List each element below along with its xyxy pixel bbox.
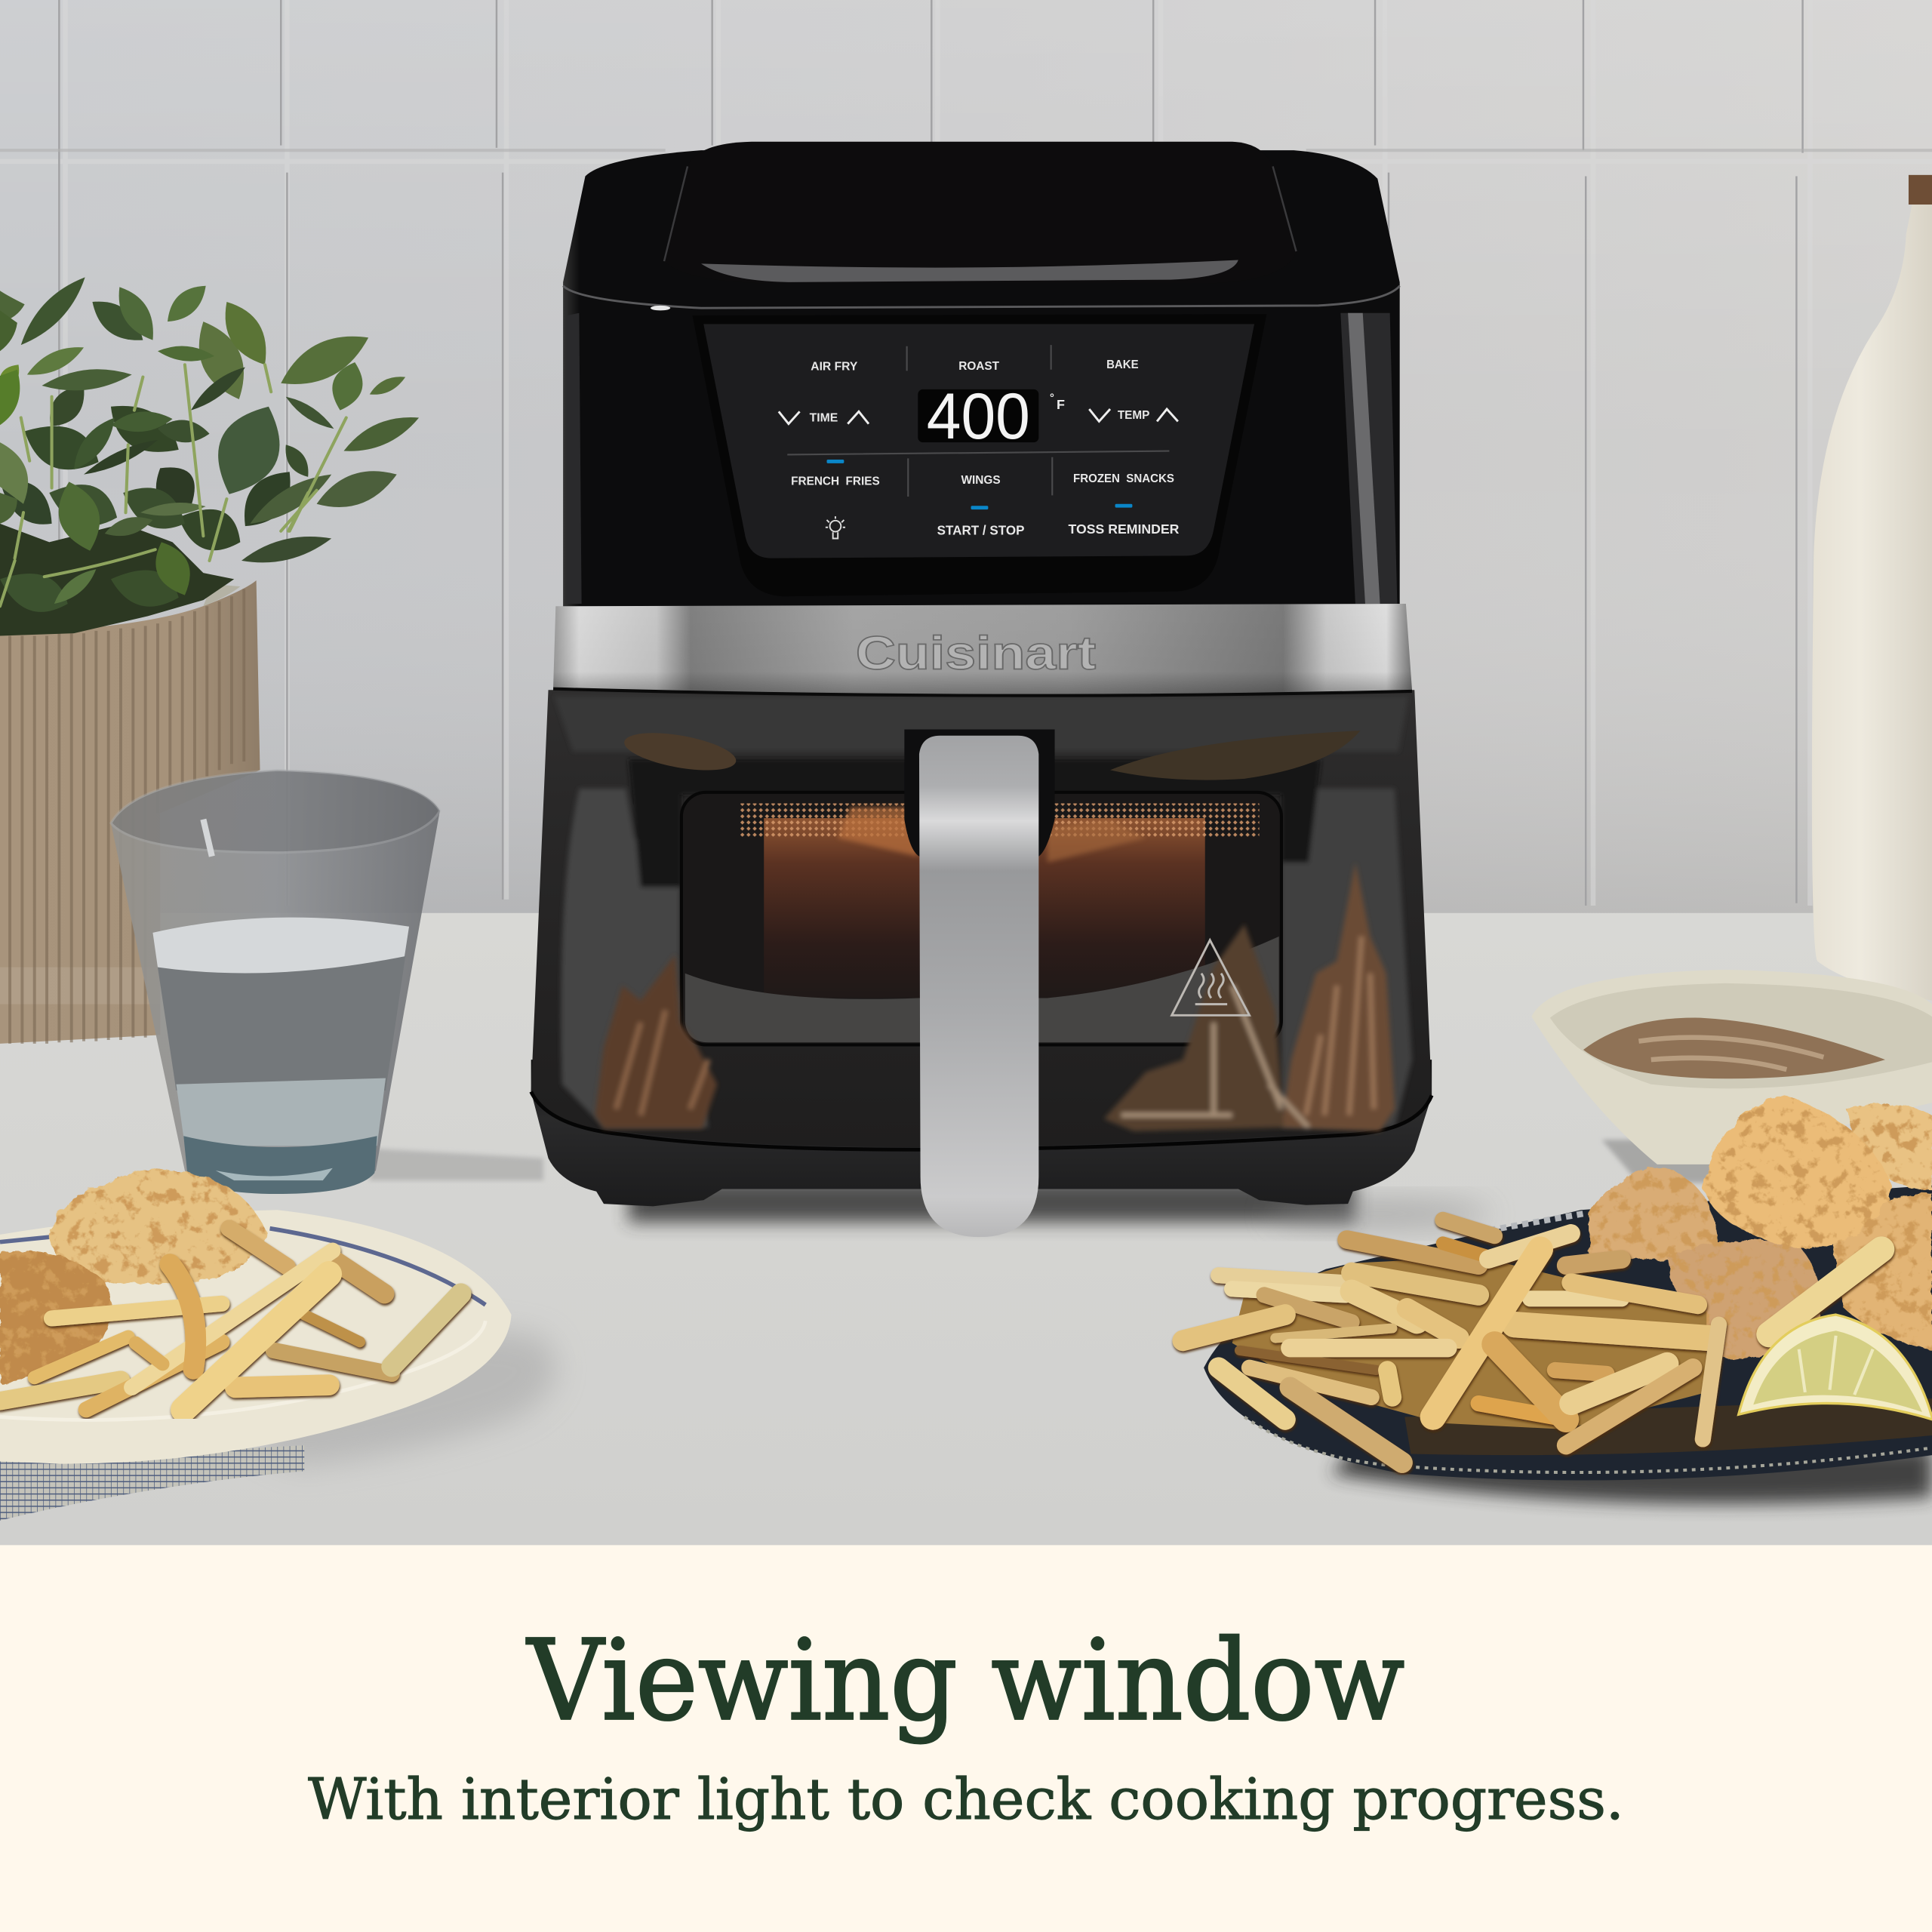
leaves <box>0 277 419 612</box>
countertop <box>0 913 1932 1548</box>
hot surface warning icon <box>1172 940 1250 1015</box>
label: roast: ROAST <box>958 360 1000 373</box>
plate body <box>0 1210 512 1464</box>
caption panel <box>0 1545 1932 1932</box>
milk bottle <box>1812 175 1932 1001</box>
label: wings: WINGS <box>961 474 1001 487</box>
label: time: TIME <box>810 411 838 424</box>
crispy nuggets <box>1589 1095 1932 1359</box>
napkin <box>0 1445 304 1521</box>
control panel <box>703 324 1254 558</box>
basket <box>531 690 1432 1147</box>
plate body <box>1204 1186 1932 1481</box>
fries backing <box>1232 1257 1706 1429</box>
stems <box>0 365 346 606</box>
french fries <box>1183 1220 1881 1463</box>
viewing window <box>681 792 1281 1044</box>
base <box>531 1060 1432 1206</box>
dip <box>1583 1018 1885 1078</box>
label: bake: BAKE <box>1106 358 1139 371</box>
wall background <box>0 0 1932 918</box>
handle <box>919 736 1038 1237</box>
side reflections <box>555 696 1412 1128</box>
nuggets <box>0 1169 266 1383</box>
dip bowl <box>1531 970 1932 1183</box>
title: Viewing window <box>526 1617 1404 1746</box>
light caustic beside glass <box>370 1149 543 1180</box>
upper body <box>563 150 1400 609</box>
right plate <box>1183 1095 1932 1504</box>
light bulb icon <box>826 516 845 538</box>
left plate <box>0 1169 556 1521</box>
Cuisinart logo: Cuisinart <box>856 628 1096 680</box>
air fryer <box>531 142 1432 1237</box>
plant mass <box>0 524 234 635</box>
tile grid <box>0 0 1932 906</box>
label: start stop: START / STOP <box>937 523 1025 538</box>
pot <box>0 580 260 1044</box>
time and temp arrows <box>779 409 1178 424</box>
label: french fries: FRENCH FRIES <box>791 475 880 488</box>
lid vent <box>664 142 1297 284</box>
fries reflected in basket <box>595 863 1395 1131</box>
potted plant <box>0 277 419 1044</box>
status lights <box>827 460 1132 509</box>
label: frozen snacks: FROZEN SNACKS <box>1073 472 1174 485</box>
temperature display: 400 <box>927 380 1030 453</box>
fries <box>0 1229 461 1410</box>
label: air fry: AIR FRY <box>811 361 858 374</box>
water glass <box>111 770 543 1194</box>
control panel bezel <box>693 314 1266 596</box>
wooden cap <box>1909 175 1932 205</box>
glass seam <box>531 1092 1432 1149</box>
label: toss reminder: TOSS REMINDER <box>1069 521 1180 537</box>
fahrenheit unit: F <box>1057 397 1065 412</box>
degree mark: ° <box>1050 392 1054 405</box>
subtitle: With interior light to check cooking progress. <box>308 1766 1624 1832</box>
fryer cast shadow <box>629 1180 1491 1226</box>
stainless band <box>553 604 1412 696</box>
lemon wedge <box>1739 1315 1932 1420</box>
handle mount <box>904 730 1055 857</box>
label: temp: TEMP <box>1118 409 1149 422</box>
top reflections of food <box>622 726 1360 780</box>
